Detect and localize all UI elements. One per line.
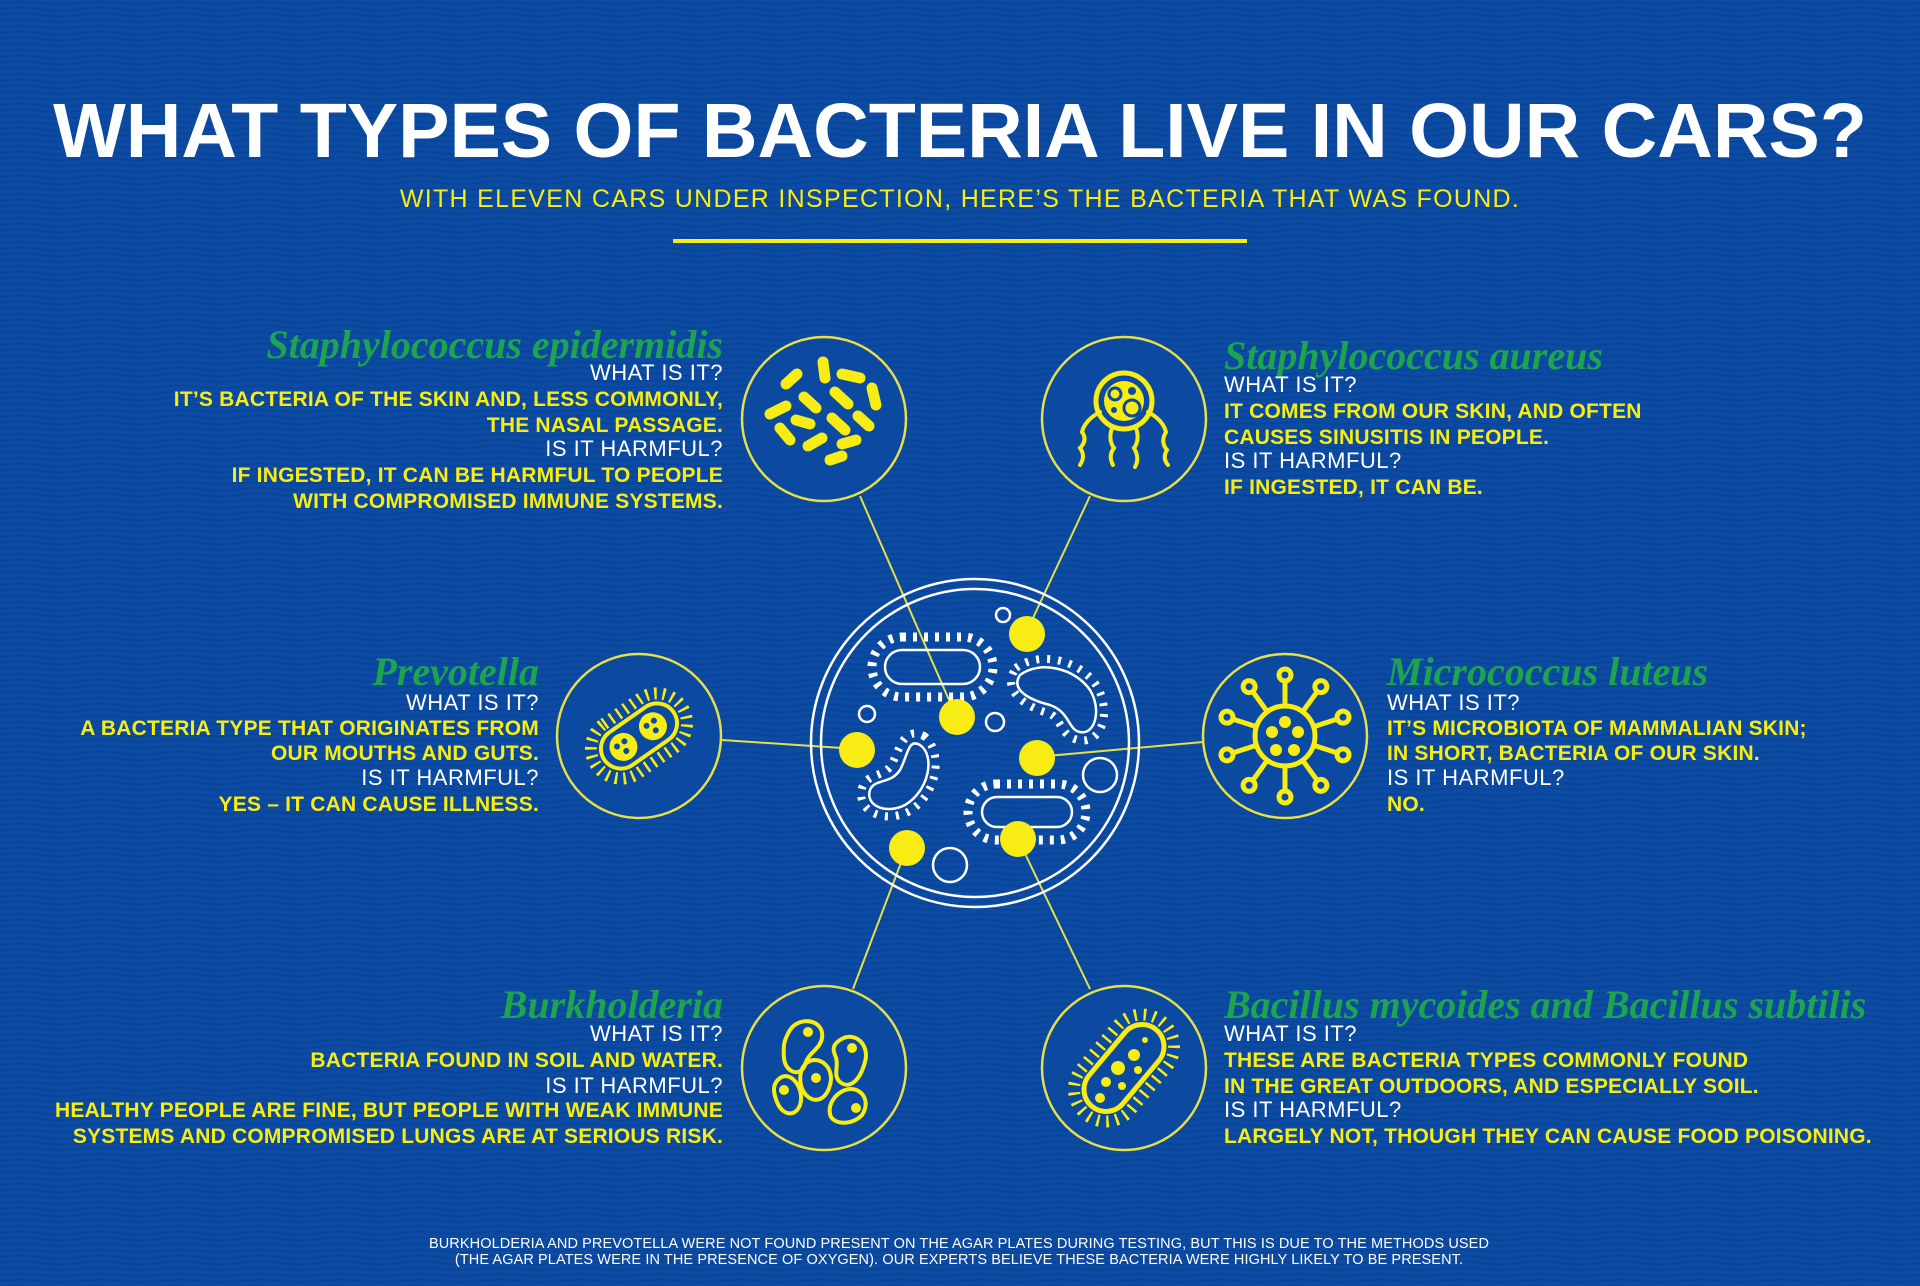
text: staphylococcus epidermidis: IF INGESTED, IT CAN BE HARMFUL TO PEOPLE bbox=[232, 464, 723, 487]
text: micrococcus luteus: IN SHORT, BACTERIA OF OUR SKIN. bbox=[1387, 742, 1760, 765]
icon: micrococcus luteus bbox=[1203, 654, 1367, 818]
text: burkholderia: BACTERIA FOUND IN SOIL AND WATER. bbox=[310, 1049, 723, 1072]
footnote: (THE AGAR PLATES WERE IN THE PRESENCE OF OXYGEN). OUR EXPERTS BELIEVE THESE BACTERIA WERE HIGHLY LIKELY TO BE PRESENT. bbox=[455, 1252, 1463, 1268]
text: prevotella: IS IT HARMFUL? bbox=[361, 765, 539, 790]
text: staphylococcus aureus: CAUSES SINUSITIS IN PEOPLE. bbox=[1224, 426, 1549, 449]
bean bacterium left bbox=[861, 733, 936, 816]
text: micrococcus luteus: WHAT IS IT? bbox=[1387, 690, 1520, 715]
text: burkholderia: Burkholderia bbox=[500, 982, 723, 1027]
yellow colony dots bbox=[839, 616, 1055, 866]
text: staphylococcus epidermidis: THE NASAL PASSAGE. bbox=[487, 414, 723, 437]
text: micrococcus luteus: IS IT HARMFUL? bbox=[1387, 765, 1565, 790]
text: micrococcus luteus: NO. bbox=[1387, 793, 1425, 816]
text: staphylococcus aureus: WHAT IS IT? bbox=[1224, 372, 1357, 397]
text: burkholderia: IS IT HARMFUL? bbox=[545, 1073, 723, 1098]
text: bacillus: IN THE GREAT OUTDOORS, AND ESPECIALLY SOIL. bbox=[1224, 1075, 1759, 1098]
text: prevotella: OUR MOUTHS AND GUTS. bbox=[271, 742, 539, 765]
text: bacillus: IS IT HARMFUL? bbox=[1224, 1097, 1402, 1122]
text: staphylococcus epidermidis: Staphylococcus epidermidis bbox=[266, 322, 723, 367]
text: staphylococcus epidermidis: IT’S BACTERIA OF THE SKIN AND, LESS COMMONLY, bbox=[174, 388, 723, 411]
text: burkholderia: SYSTEMS AND COMPROMISED LUNGS ARE AT SERIOUS RISK. bbox=[73, 1125, 723, 1148]
icon: staphylococcus aureus bbox=[1042, 337, 1206, 501]
text: bacillus: Bacillus mycoides and Bacillus subtilis bbox=[1223, 982, 1866, 1027]
connector lines bbox=[722, 496, 1203, 989]
text: staphylococcus epidermidis bbox=[174, 322, 723, 513]
text: bacillus: THESE ARE BACTERIA TYPES COMMONLY FOUND bbox=[1224, 1049, 1748, 1072]
icon: prevotella bbox=[557, 654, 721, 818]
subtitle: WITH ELEVEN CARS UNDER INSPECTION, HERE’S THE BACTERIA THAT WAS FOUND. bbox=[400, 185, 1520, 213]
text: micrococcus luteus: Micrococcus luteus bbox=[1386, 649, 1708, 694]
text: prevotella bbox=[80, 649, 539, 816]
text: micrococcus luteus: IT’S MICROBIOTA OF MAMMALIAN SKIN; bbox=[1387, 717, 1807, 740]
text: burkholderia bbox=[55, 982, 723, 1148]
text: bacillus bbox=[1223, 982, 1872, 1148]
text: prevotella: WHAT IS IT? bbox=[406, 690, 539, 715]
text: staphylococcus epidermidis: WHAT IS IT? bbox=[590, 360, 723, 385]
bottom rod bacterium bbox=[968, 784, 1086, 840]
text: prevotella: Prevotella bbox=[371, 649, 539, 694]
text: bacillus: WHAT IS IT? bbox=[1224, 1021, 1357, 1046]
text: staphylococcus epidermidis: WITH COMPROMISED IMMUNE SYSTEMS. bbox=[293, 490, 723, 513]
text: staphylococcus aureus: Staphylococcus aureus bbox=[1224, 333, 1603, 378]
icon: burkholderia bbox=[742, 986, 906, 1150]
title: WHAT TYPES OF BACTERIA LIVE IN OUR CARS? bbox=[53, 88, 1867, 174]
text: micrococcus luteus bbox=[1386, 649, 1807, 816]
text: staphylococcus aureus bbox=[1224, 333, 1642, 499]
text: prevotella: YES – IT CAN CAUSE ILLNESS. bbox=[219, 793, 539, 816]
text: burkholderia: HEALTHY PEOPLE ARE FINE, BUT PEOPLE WITH WEAK IMMUNE bbox=[55, 1099, 723, 1122]
text: staphylococcus epidermidis: IS IT HARMFUL? bbox=[545, 436, 723, 461]
footnote bbox=[429, 1236, 1489, 1268]
footnote: BURKHOLDERIA AND PREVOTELLA WERE NOT FOUND PRESENT ON THE AGAR PLATES DURING TESTING, BUT THIS IS DUE TO THE METHODS USED bbox=[429, 1236, 1489, 1252]
petri dish bbox=[811, 579, 1139, 907]
text: prevotella: A BACTERIA TYPE THAT ORIGINATES FROM bbox=[80, 717, 539, 740]
text: staphylococcus aureus: IS IT HARMFUL? bbox=[1224, 448, 1402, 473]
text: bacillus: LARGELY NOT, THOUGH THEY CAN CAUSE FOOD POISONING. bbox=[1224, 1125, 1872, 1148]
icon: staphylococcus epidermidis bbox=[742, 337, 906, 501]
icon: bacillus bbox=[1042, 986, 1206, 1150]
text: staphylococcus aureus: IT COMES FROM OUR SKIN, AND OFTEN bbox=[1224, 400, 1642, 423]
top rod bacterium bbox=[872, 637, 993, 697]
text: staphylococcus aureus: IF INGESTED, IT CAN BE. bbox=[1224, 476, 1483, 499]
bean bacterium top-right bbox=[1011, 659, 1104, 741]
text: burkholderia: WHAT IS IT? bbox=[590, 1021, 723, 1046]
